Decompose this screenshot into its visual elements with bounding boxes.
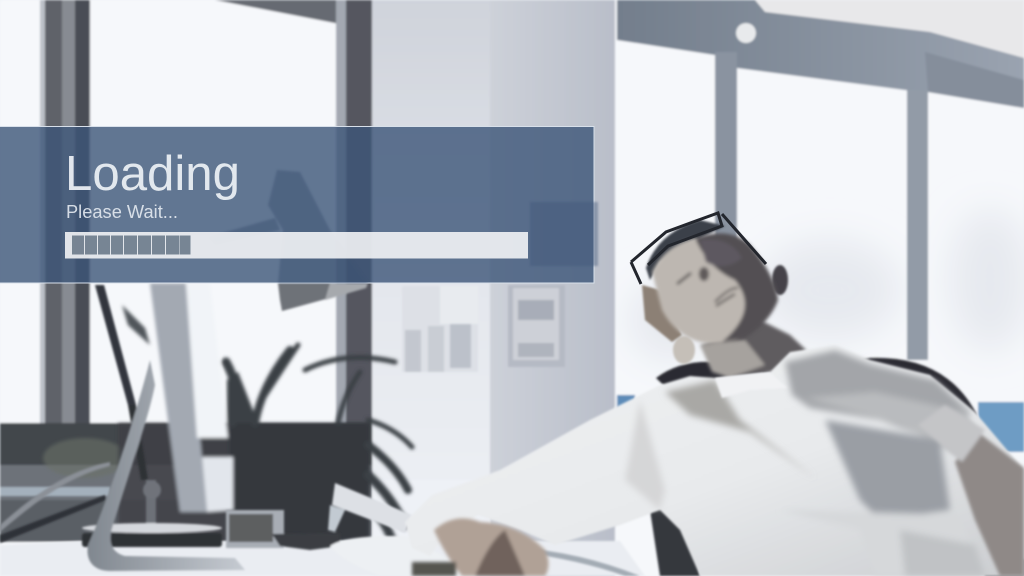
wall and column xyxy=(372,0,615,576)
desk lamp and monitor stand xyxy=(0,285,245,571)
forearm xyxy=(918,405,1024,576)
desk surface xyxy=(0,541,645,576)
progress segments xyxy=(72,236,190,254)
cloudy sky in right windows xyxy=(630,210,1024,360)
glasses xyxy=(631,213,766,284)
dark wall square behind panel xyxy=(530,202,598,266)
neck xyxy=(700,320,806,380)
hand on desk xyxy=(412,518,548,576)
monitor xyxy=(150,283,233,512)
lamp shade below panel xyxy=(278,283,368,311)
loading panel xyxy=(0,126,598,283)
shirt collar and folds xyxy=(625,350,985,576)
hair xyxy=(642,220,725,342)
person asleep in chair xyxy=(405,213,1024,576)
desk objects: clock, phone, notebook, keyboard xyxy=(226,483,640,576)
left window frame xyxy=(0,0,372,542)
face xyxy=(652,233,778,344)
desk xyxy=(372,480,490,541)
lamp shade silhouette behind panel xyxy=(208,170,368,283)
heading: Loading xyxy=(65,147,240,201)
office chair xyxy=(650,358,1024,576)
plant xyxy=(43,305,412,541)
ear xyxy=(673,265,788,364)
subtitle: Please Wait... xyxy=(66,202,178,222)
right windows xyxy=(617,0,1024,452)
shirt xyxy=(405,345,1024,576)
progress bar xyxy=(65,232,528,258)
notes on the wall xyxy=(402,285,565,372)
plant and monitor xyxy=(43,283,412,541)
